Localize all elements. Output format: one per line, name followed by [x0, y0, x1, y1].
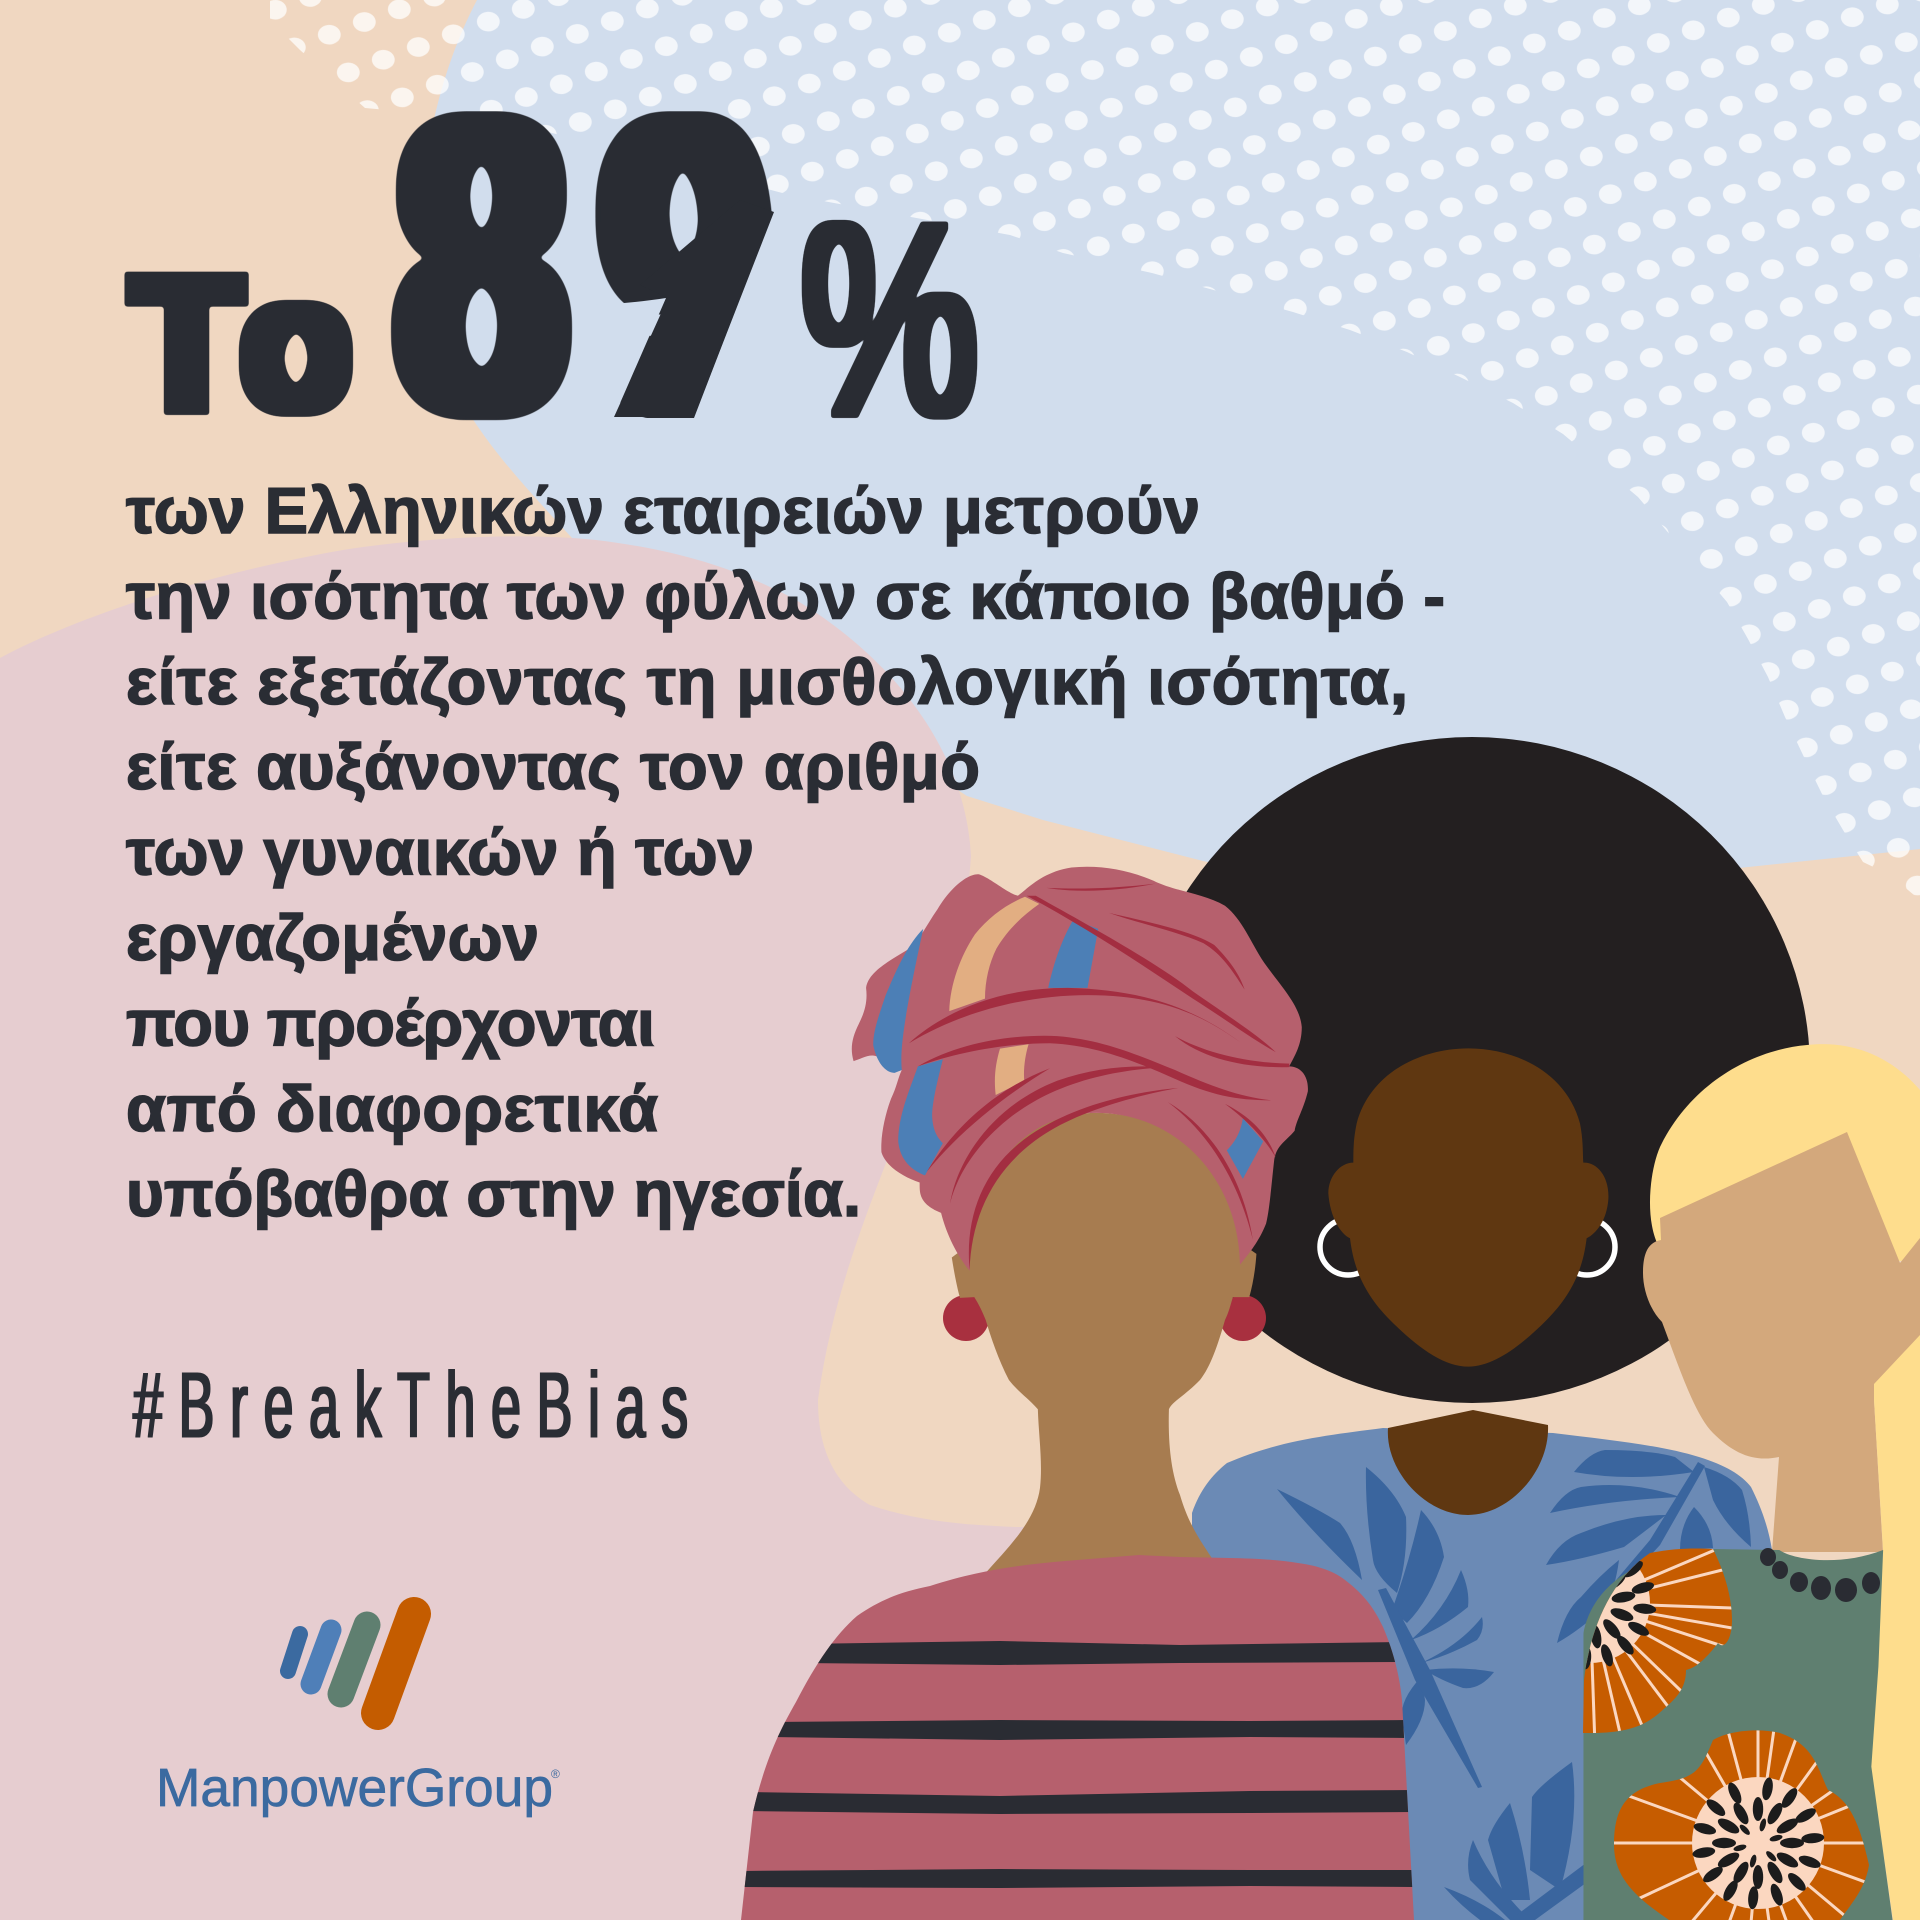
body paragraph: από διαφορετικά	[126, 1072, 658, 1145]
hashtag: #BreakTheBias	[133, 1354, 688, 1458]
background: blue blob	[421, 0, 1920, 900]
blue bands	[873, 920, 1263, 1179]
striped pink shirt	[741, 1555, 1414, 1920]
blonde hair top	[1650, 1044, 1920, 1270]
body paragraph: είτε αυξάνοντας τον αριθμό	[126, 730, 980, 803]
woman with headwrap (left)	[735, 867, 1420, 1920]
background: white dot pattern	[270, 0, 1920, 896]
leaf pattern	[1277, 1450, 1751, 1920]
number: 89: 9	[601, 28, 769, 503]
afro hair	[1134, 737, 1810, 1403]
body paragraph: που προέρχονται	[126, 986, 655, 1059]
word: Το: ο	[242, 238, 350, 448]
woman with blonde hair (right)	[1583, 1044, 1920, 1920]
body paragraph	[126, 474, 1445, 1230]
tan bands	[949, 897, 1039, 1095]
nine: background cut-outs around the straight leg	[585, 215, 796, 432]
body paragraph: εργαζομένων	[126, 901, 539, 974]
headline: Το 89%	[132, 28, 978, 503]
percent sign: %	[801, 166, 978, 472]
blue leaf shirt	[1192, 1428, 1772, 1920]
number: 89: 8	[397, 28, 565, 503]
shirt stripes	[735, 1641, 1420, 1888]
body paragraph: υπόβαθρα στην ηγεσία.	[126, 1157, 861, 1230]
necklace	[1760, 1548, 1880, 1602]
neck	[1388, 1410, 1548, 1515]
headwrap base	[852, 867, 1308, 1271]
background: pink blob	[0, 536, 1100, 1920]
green top	[1583, 1549, 1893, 1920]
nine: straight leg	[614, 200, 774, 417]
headwrap	[852, 867, 1308, 1271]
hoop earrings	[1320, 1219, 1615, 1275]
registered mark: ®	[551, 1767, 560, 1781]
woman with afro (centre)	[1134, 737, 1810, 1920]
body paragraph: των γυναικών ή των	[126, 816, 754, 889]
face and neck	[952, 1113, 1256, 1574]
body paragraph: των Ελληνικών εταιρειών μετρούν	[126, 474, 1200, 547]
face and neck	[1643, 1132, 1920, 1552]
flower: lower	[1614, 1730, 1869, 1920]
logo mark: four slanted bars	[288, 1614, 414, 1713]
long blonde hair strand	[1871, 1335, 1920, 1920]
logo: ManpowerGroup	[156, 1614, 560, 1818]
flower: upper	[1583, 1548, 1732, 1733]
red earrings	[943, 1295, 1266, 1341]
headwrap folds	[909, 884, 1289, 1270]
head	[1328, 1048, 1608, 1367]
number: 89	[397, 28, 769, 503]
word: Το: Τ	[132, 238, 241, 448]
word: Το	[132, 238, 350, 448]
body paragraph: την ισότητα των φύλων σε κάποιο βαθμό -	[126, 559, 1445, 632]
body paragraph: είτε εξετάζοντας τη μισθολογική ισότητα,	[126, 645, 1408, 718]
logo wordmark: ManpowerGroup	[156, 1758, 553, 1818]
